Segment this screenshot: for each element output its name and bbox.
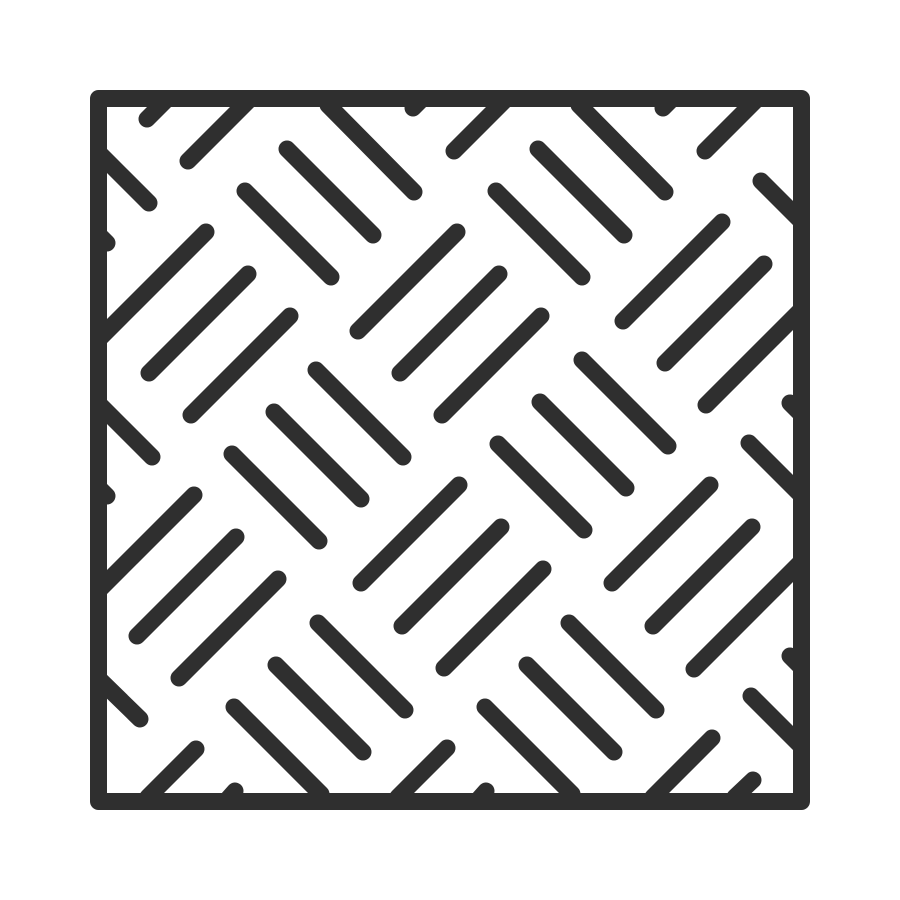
diagonal tread pattern [100,100,800,800]
square frame [98,98,802,802]
